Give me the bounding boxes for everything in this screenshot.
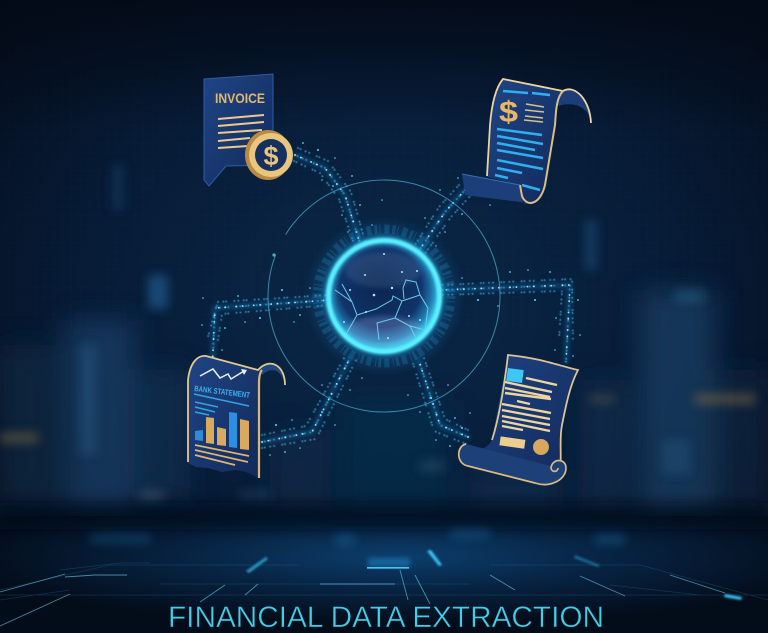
document: scroll contract [459, 355, 578, 485]
document: bank statement [188, 356, 285, 478]
central data globe [304, 216, 464, 376]
scattered data particles [201, 142, 581, 456]
document: invoice with dollar coin [204, 74, 293, 186]
circuit floor [0, 503, 768, 633]
bank statement heading: BANK STATEMENT [194, 384, 251, 400]
blurred city skyline [0, 290, 768, 515]
orbit ring [224, 136, 544, 456]
line chart arrow [200, 369, 244, 379]
bar chart [195, 412, 249, 450]
connector network: data particle streams [207, 148, 573, 448]
invoice heading: INVOICE [215, 91, 265, 106]
blurred city lights [0, 165, 755, 502]
document: curled receipt [462, 79, 591, 204]
document: curled receipt: $ [499, 96, 518, 129]
icon: dollar coin: $ [263, 141, 279, 171]
